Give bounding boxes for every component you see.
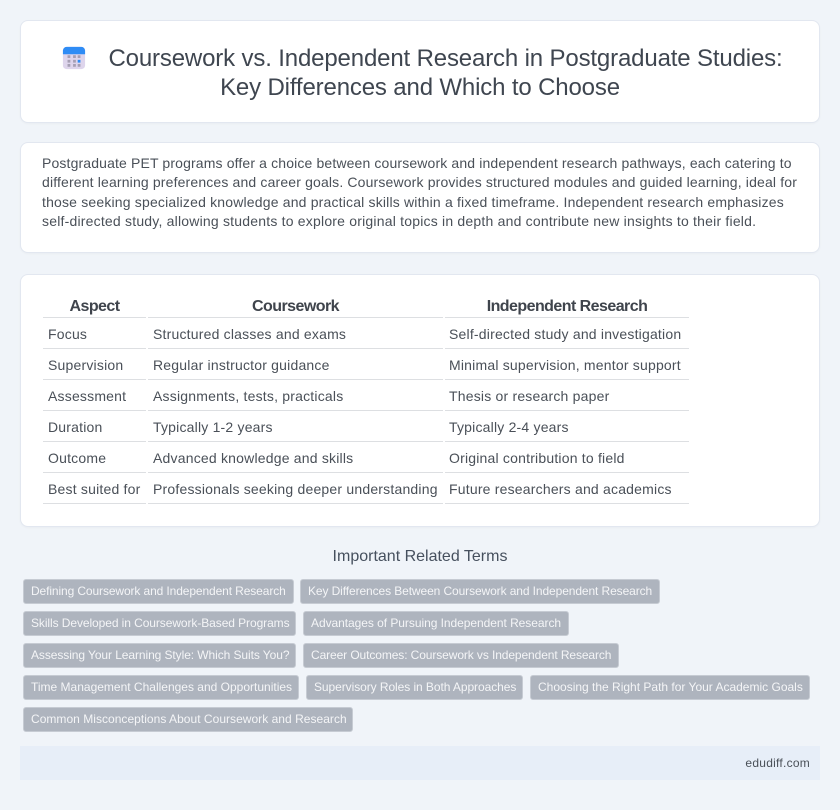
row: supervision: Regular instructor guidance bbox=[153, 357, 330, 373]
tag bbox=[530, 675, 810, 700]
intro paragraph card bbox=[20, 142, 820, 253]
comparison table card bbox=[20, 274, 820, 527]
table header: Independent Research bbox=[487, 298, 647, 315]
tag bbox=[23, 579, 294, 604]
row: best suited for: Professionals seeking deeper understanding bbox=[153, 481, 438, 497]
table header: Coursework bbox=[252, 298, 339, 315]
row: outcome: Original contribution to field bbox=[449, 450, 625, 466]
row: duration: Typically 2-4 years bbox=[449, 419, 569, 435]
row: duration: Typically 1-2 years bbox=[153, 419, 273, 435]
row: assessment: Assignments, tests, practicals bbox=[153, 388, 343, 404]
row: supervision bbox=[48, 357, 681, 373]
intro text: different learning preferences and career goals. Coursework provides structured modules and guided learning, ideal for bbox=[42, 174, 797, 190]
table header bbox=[69, 298, 647, 315]
row: outcome: Outcome bbox=[48, 450, 106, 466]
comparison table bbox=[43, 298, 689, 504]
tag bbox=[23, 707, 353, 732]
row: duration: Duration bbox=[48, 419, 103, 435]
tag: Key Differences Between Coursework and Independent Research bbox=[308, 584, 652, 598]
title: Coursework vs. Independent Research in Postgraduate Studies: bbox=[108, 45, 783, 72]
row: assessment: Thesis or research paper bbox=[449, 388, 609, 404]
row: best suited for: Future researchers and academics bbox=[449, 481, 672, 497]
tag bbox=[23, 675, 299, 700]
table header: Aspect bbox=[69, 298, 120, 315]
tag bbox=[300, 579, 660, 604]
tag: Career Outcomes: Coursework vs Independent Research bbox=[311, 648, 611, 662]
related terms tags bbox=[23, 579, 810, 732]
tag: Advantages of Pursuing Independent Research bbox=[311, 616, 561, 630]
title: Key Differences and Which to Choose bbox=[220, 74, 620, 101]
source label: edudiff.com bbox=[745, 756, 810, 770]
intro text: those seeking specialized knowledge and practical skills within a fixed timeframe. Independent research emphasizes bbox=[42, 194, 784, 210]
title bbox=[108, 45, 783, 101]
tag: Choosing the Right Path for Your Academic Goals bbox=[538, 680, 803, 694]
tag bbox=[303, 643, 619, 668]
tag: Time Management Challenges and Opportunities bbox=[31, 680, 292, 694]
row: focus: Self-directed study and investigation bbox=[449, 326, 681, 342]
row: assessment bbox=[48, 388, 610, 404]
tag bbox=[306, 675, 523, 700]
tag bbox=[23, 611, 296, 636]
intro text: Postgraduate PET programs offer a choice between coursework and independent research pathways, each catering to bbox=[42, 155, 792, 171]
row: supervision: Minimal supervision, mentor support bbox=[449, 357, 681, 373]
tag: Assessing Your Learning Style: Which Suits You? bbox=[31, 648, 289, 662]
tag: Common Misconceptions About Coursework and Research bbox=[31, 712, 347, 726]
related terms heading: Important Related Terms bbox=[333, 548, 507, 565]
tag: Supervisory Roles in Both Approaches bbox=[314, 680, 516, 694]
header card bbox=[20, 20, 820, 123]
tag: Skills Developed in Coursework-Based Programs bbox=[31, 616, 290, 630]
row: outcome bbox=[48, 450, 625, 466]
footer bbox=[20, 746, 820, 780]
tag bbox=[303, 611, 569, 636]
intro text: self-directed study, allowing students to explore original topics in depth and contribute new insights to their field. bbox=[42, 213, 756, 229]
row: focus: Focus bbox=[48, 326, 87, 342]
row: best suited for bbox=[48, 481, 672, 497]
intro text bbox=[42, 155, 797, 229]
tag bbox=[23, 643, 296, 668]
icon: calendar bbox=[62, 46, 86, 70]
row: best suited for: Best suited for bbox=[48, 481, 140, 497]
row: outcome: Advanced knowledge and skills bbox=[153, 450, 353, 466]
row: focus: Structured classes and exams bbox=[153, 326, 346, 342]
row: supervision: Supervision bbox=[48, 357, 123, 373]
row: focus bbox=[48, 326, 681, 342]
row: assessment: Assessment bbox=[48, 388, 126, 404]
row: duration bbox=[48, 419, 569, 435]
tag: Defining Coursework and Independent Research bbox=[31, 584, 286, 598]
